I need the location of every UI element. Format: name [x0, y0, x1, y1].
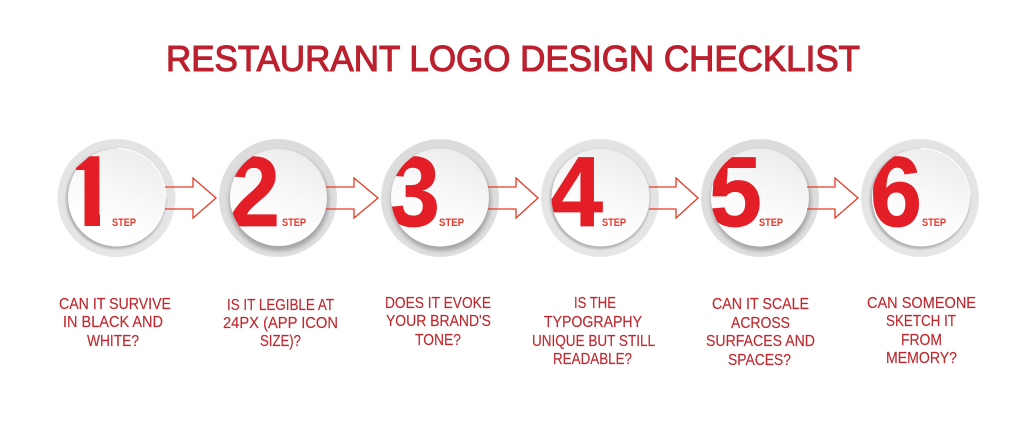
- question 2: IS IT LEGIBLE AT: [227, 297, 334, 314]
- step 1 badge: [58, 136, 176, 257]
- question 2: [223, 297, 338, 350]
- question 5: SURFACES AND: [706, 333, 815, 350]
- question 5: SPACES?: [728, 352, 791, 369]
- question 1: IN BLACK AND: [63, 314, 163, 331]
- question 6: MEMORY?: [886, 350, 957, 367]
- question 2: 24PX (APP ICON: [223, 315, 338, 332]
- question 3: TONE?: [415, 332, 461, 349]
- step label 6: STEP: [922, 217, 946, 229]
- number 3: 3: [387, 136, 440, 247]
- question 4: READABLE?: [553, 351, 632, 368]
- step label 3: STEP: [439, 217, 464, 229]
- step 6 badge: [861, 136, 979, 257]
- question 3: [385, 295, 491, 349]
- number 5: 5: [708, 136, 762, 247]
- question 6: SKETCH IT: [886, 313, 956, 330]
- step 5 badge: [701, 136, 819, 257]
- question 4: [532, 295, 655, 368]
- number 2: 2: [228, 136, 280, 247]
- number 4: 4: [549, 136, 603, 247]
- number 6: 6: [870, 136, 922, 247]
- question 6: FROM: [901, 332, 942, 349]
- arrow 4: [649, 178, 698, 218]
- number 1: 1: [62, 136, 117, 247]
- arrow 1: [165, 178, 216, 218]
- title: RESTAURANT LOGO DESIGN CHECKLIST: [166, 38, 860, 79]
- question 2: SIZE)?: [260, 333, 301, 350]
- step 3 badge: [381, 136, 499, 257]
- question 4: IS THE: [574, 295, 616, 312]
- arrow 2: [326, 178, 378, 218]
- question 1: [59, 296, 171, 350]
- question 5: [706, 296, 815, 369]
- question 4: TYPOGRAPHY: [544, 314, 642, 331]
- arrow 5: [807, 178, 858, 218]
- arrow 3: [488, 178, 538, 218]
- question 6: [867, 295, 976, 367]
- question 1: WHITE?: [87, 333, 139, 350]
- question 5: CAN IT SCALE: [712, 296, 809, 313]
- question 1: CAN IT SURVIVE: [59, 296, 171, 313]
- question 3: DOES IT EVOKE: [385, 295, 491, 312]
- step label 4: STEP: [602, 217, 626, 229]
- step 2 badge: [219, 136, 337, 257]
- step label 1: STEP: [112, 217, 136, 229]
- question 5: ACROSS: [731, 315, 790, 332]
- step 4 badge: [541, 136, 659, 257]
- question 3: YOUR BRAND'S: [386, 313, 491, 330]
- question 6: CAN SOMEONE: [867, 295, 976, 312]
- question 4: UNIQUE BUT STILL: [532, 333, 655, 350]
- step label 2: STEP: [282, 217, 306, 229]
- step label 5: STEP: [759, 217, 783, 229]
